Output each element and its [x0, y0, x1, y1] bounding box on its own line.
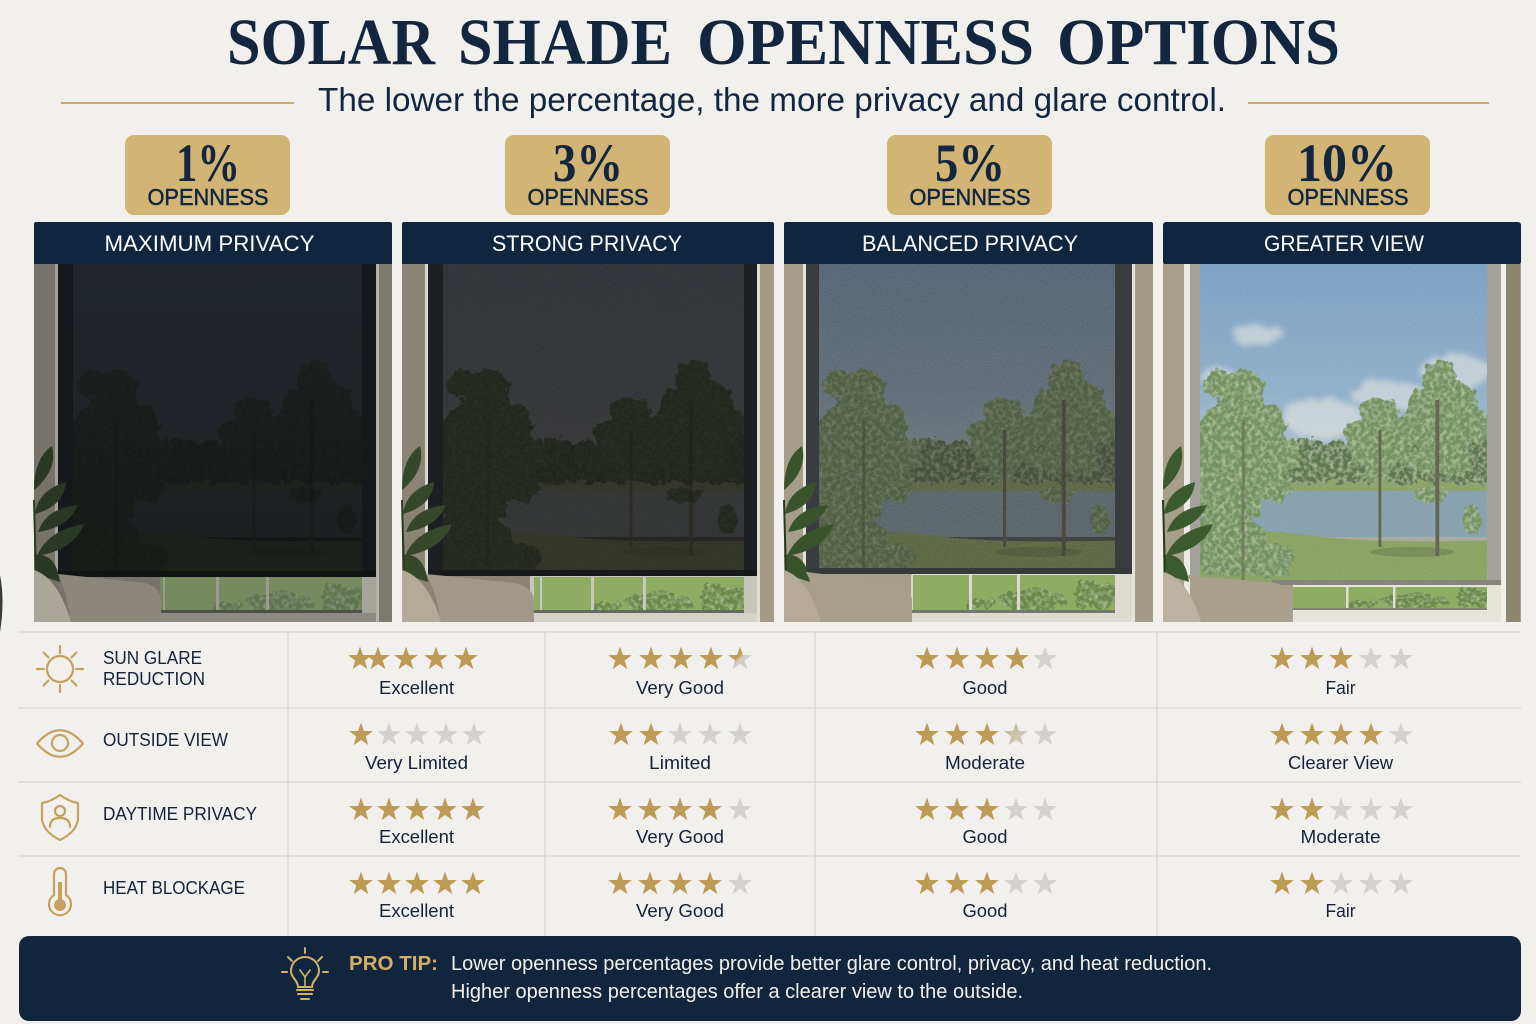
- label: heat blockage: HEAT BLOCKAGE: [103, 878, 245, 898]
- header: maximum privacy: [34, 222, 392, 265]
- rating 1%: excellent: Excellent: [379, 901, 454, 921]
- rating 3%: very good: [608, 798, 752, 847]
- icon: shield with person: [42, 795, 78, 840]
- title: SHADE: [458, 6, 672, 79]
- rating 10%: fair: Fair: [1326, 901, 1356, 921]
- rating 3%: very good: [608, 872, 752, 921]
- pro tip text: [451, 953, 1212, 1003]
- row: heat blockage: [49, 868, 1413, 921]
- badge: 1%: OPENNESS: [148, 184, 268, 210]
- rating 3%: limited: Limited: [649, 753, 711, 773]
- panel: 10% openness: [1163, 133, 1521, 627]
- rating 10%: fair: Fair: [1326, 678, 1356, 698]
- rating 3%: very good: Very Good: [636, 901, 724, 921]
- title: OPTIONS: [1057, 6, 1340, 79]
- rating 10%: clearer view: [1270, 722, 1413, 773]
- row: sun glare reduction: [37, 646, 1413, 698]
- pro tip text: Lower openness percentages provide better glare control, privacy, and heat reduction.: [451, 953, 1212, 975]
- icon: sun: [37, 646, 83, 692]
- table grid: [18, 632, 1521, 936]
- rating 10%: fair: [1270, 872, 1413, 921]
- rating 10%: fair: [1270, 646, 1413, 698]
- label: sun glare reduction: REDUCTION: [103, 669, 205, 689]
- label: outside view: OUTSIDE VIEW: [103, 730, 228, 750]
- badge: 3%: 3%: [553, 133, 623, 193]
- rating 10%: clearer view: Clearer View: [1288, 753, 1394, 773]
- pro tip banner: [19, 936, 1521, 1021]
- pro tip label: PRO TIP:: [349, 953, 438, 975]
- header: strong privacy: STRONG PRIVACY: [492, 231, 682, 256]
- badge: 5%: 5%: [935, 133, 1005, 193]
- rating 1%: excellent: [349, 798, 485, 847]
- title: [227, 6, 1340, 79]
- rating 3%: very good: [608, 646, 752, 698]
- header: maximum privacy: MAXIMUM PRIVACY: [104, 231, 315, 256]
- rating 1%: excellent: [349, 872, 485, 921]
- panel: 1% openness: [34, 133, 392, 627]
- row: outside view: [37, 722, 1413, 773]
- rating 5%: moderate: Moderate: [945, 753, 1025, 773]
- badge: 3%: OPENNESS: [528, 184, 648, 210]
- rating 1%: excellent: Excellent: [379, 678, 454, 698]
- label: daytime privacy: DAYTIME PRIVACY: [103, 804, 257, 824]
- window photo: 1% shade: [34, 264, 392, 627]
- rating 3%: very good: Very Good: [636, 827, 724, 847]
- rating 5%: good: [915, 646, 1057, 698]
- rating 1%: very limited: [349, 722, 486, 773]
- rating 5%: moderate: [915, 722, 1057, 773]
- window photo: 5% shade: [784, 264, 1153, 627]
- badge: 10%: 10%: [1297, 133, 1397, 193]
- panel: 5% openness: [784, 133, 1153, 627]
- icon: eye: [37, 730, 83, 757]
- icon: thermometer: [49, 868, 71, 915]
- icon: light bulb: [282, 948, 328, 999]
- window photo: 3% shade: [402, 264, 774, 627]
- badge: 5%: OPENNESS: [910, 184, 1030, 210]
- rating 10%: moderate: Moderate: [1300, 827, 1380, 847]
- rating 5%: good: Good: [962, 901, 1008, 921]
- rating 3%: limited: [609, 722, 752, 773]
- edge shadow sliver: [0, 575, 2, 632]
- badge: 5%: [887, 133, 1052, 215]
- header: balanced privacy: [784, 222, 1153, 265]
- label: sun glare reduction: SUN GLARE: [103, 648, 202, 668]
- badge: 10%: OPENNESS: [1288, 184, 1408, 210]
- header: balanced privacy: BALANCED PRIVACY: [862, 231, 1078, 256]
- panel: 3% openness: [402, 133, 774, 627]
- header: greater view: [1163, 222, 1521, 265]
- badge: 3%: [505, 133, 670, 215]
- subtitle with gold rules: The lower the percentage, the more privacy and glare control.: [318, 81, 1226, 118]
- header: strong privacy: [402, 222, 774, 265]
- pro tip text: Higher openness percentages offer a clearer view to the outside.: [451, 981, 1023, 1003]
- rating 5%: good: [915, 798, 1057, 847]
- rating 5%: good: Good: [962, 827, 1008, 847]
- header: greater view: GREATER VIEW: [1264, 231, 1424, 256]
- window photo: 10% shade: [1163, 264, 1521, 627]
- rating 5%: good: Good: [962, 678, 1008, 698]
- title: OPENNESS: [697, 6, 1034, 79]
- rating 1%: very limited: Very Limited: [365, 753, 468, 773]
- title: SOLAR: [227, 6, 436, 79]
- badge: 1%: [125, 133, 290, 215]
- row: daytime privacy: [42, 795, 1413, 847]
- badge: 10%: [1265, 133, 1430, 215]
- rating 1%: excellent: [348, 646, 478, 698]
- rating 10%: moderate: [1270, 798, 1413, 847]
- badge: 1%: 1%: [176, 133, 240, 193]
- rating 5%: good: [915, 872, 1057, 921]
- rating 3%: very good: Very Good: [636, 678, 724, 698]
- rating 1%: excellent: Excellent: [379, 827, 454, 847]
- label: sun glare reduction: [103, 648, 205, 689]
